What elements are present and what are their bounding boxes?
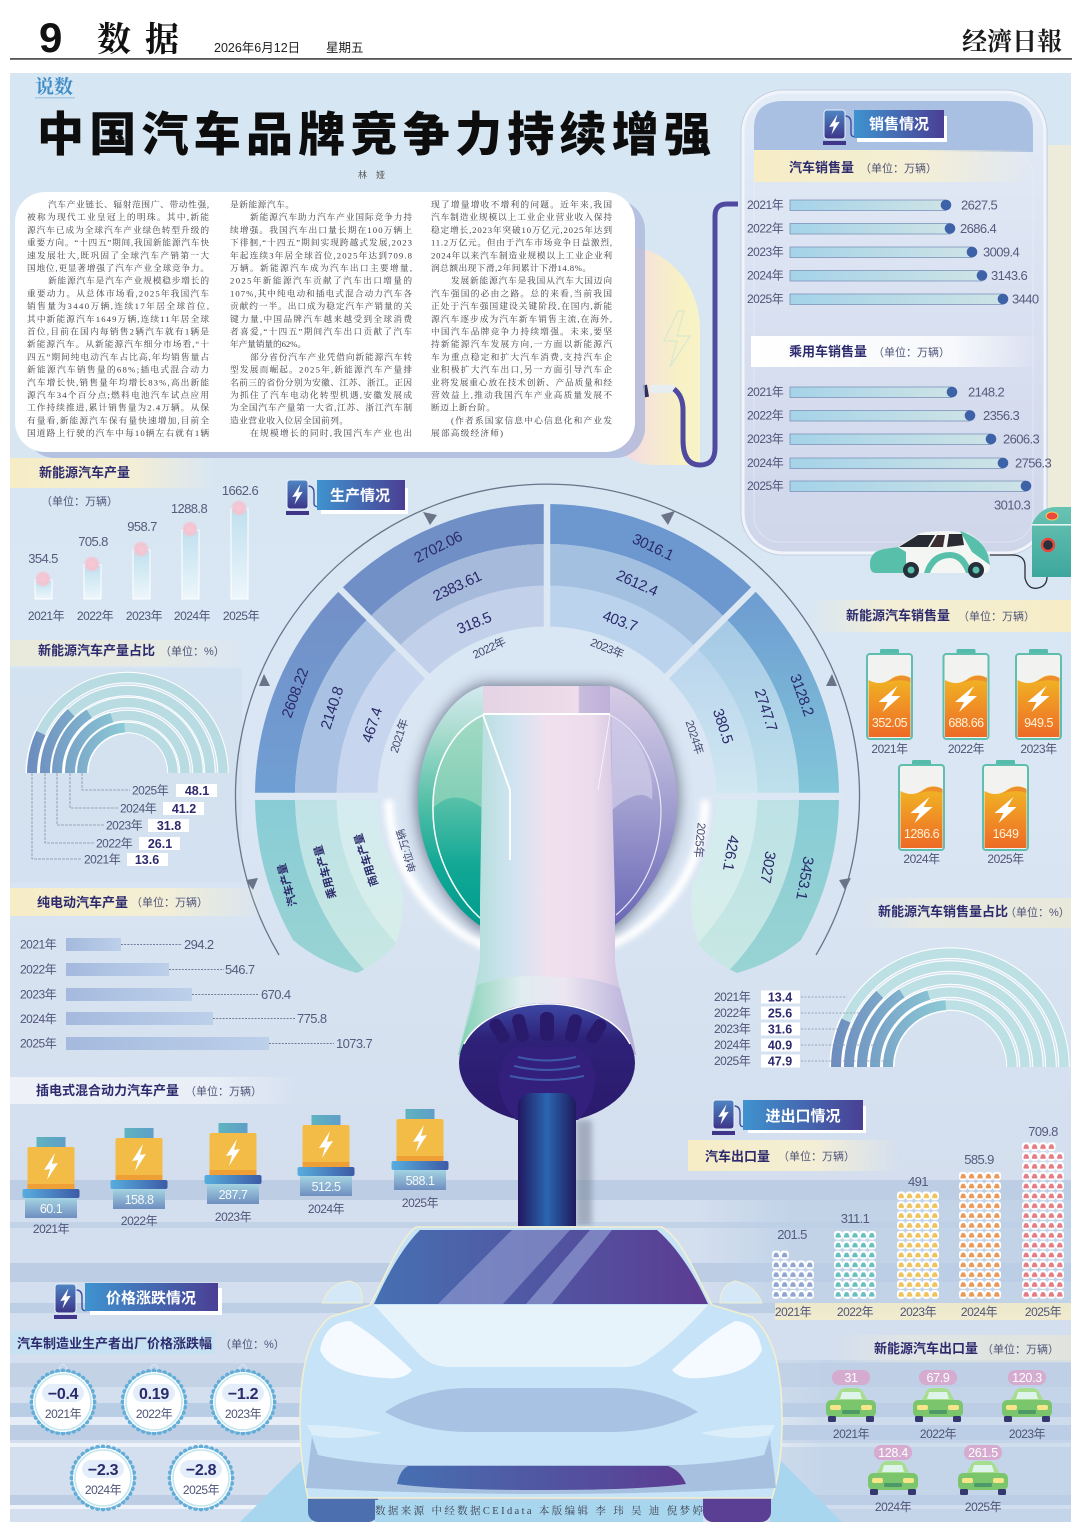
heading: NEV exports: 新能源汽车出口量	[874, 1341, 978, 1356]
mirrors	[322, 1281, 762, 1303]
lower intake	[397, 1466, 686, 1490]
chart: PHEV batteries: 158.8	[125, 1193, 154, 1207]
chart: PHEV batteries: 588.1	[406, 1174, 435, 1188]
labels: NEV sales share: 2021年	[714, 990, 751, 1004]
article column 3: 营效益上,推动我国汽车产业高质量发展不	[431, 389, 612, 400]
chart: NEV exports cars: 2024年	[875, 1500, 912, 1514]
heading: NEV production: 新能源汽车产量	[39, 465, 130, 480]
labels: NEV sales share: 25.6	[768, 1006, 792, 1020]
heading: PHEV production	[10, 1077, 300, 1104]
series labels: 乘用车产量	[311, 844, 339, 900]
article column 2: 万辆。新能源汽车成为汽车出口主要增量,	[230, 262, 412, 273]
series labels: 汽车产量	[274, 862, 300, 908]
values: 2021: 2021年	[387, 717, 411, 755]
chart: NEV exports cars: 128.4	[878, 1446, 908, 1460]
chart: NEV sales batteries: 949.5	[1024, 716, 1053, 730]
article column 3: 业将发展重心放在技术创新、产品质量和经	[431, 376, 612, 387]
heading: PHEV production: （单位：万辆）	[185, 1084, 262, 1098]
article column 1: 有量看,新能源汽车保有量快速增加,目前全	[27, 414, 209, 425]
masthead: 经濟日報	[962, 28, 1062, 56]
chart: passenger car sales bars: 3010.3	[994, 498, 1031, 512]
chart: passenger car sales bars	[747, 384, 1052, 512]
article column 1: 源汽车已成为全球汽车产业绿色转型升级的	[27, 224, 209, 235]
chart: car sales bars: 2023年	[747, 245, 784, 259]
icon: charging station	[1032, 507, 1071, 577]
heading: NEV sales: （单位：万辆）	[958, 609, 1035, 623]
heading: car sales: （单位：万辆）	[860, 161, 937, 175]
article column 2: 型发展而崛起。2025年,新能源汽车产量排	[230, 364, 412, 375]
chart: NEV exports cars: 2022年	[920, 1427, 957, 1441]
date: 2026年6月12日	[214, 41, 300, 55]
values: 2021	[279, 666, 411, 755]
chart: BEV production bars: 2023年	[20, 988, 57, 1002]
values: 2024: 2747.7	[751, 687, 780, 734]
page number: 9	[39, 14, 62, 61]
values: 2024: 3128.2	[786, 672, 817, 719]
values: 2025: 3027	[756, 850, 779, 884]
chart: NEV production columns: 958.7	[127, 519, 157, 534]
article column 2: 为抓住了汽车电动化转型机遇,安徽发展成	[230, 389, 412, 400]
article column 1: 新能源汽车。从新能源汽车细分市场看,“十	[27, 338, 209, 349]
chart: NEV sales batteries: 2022年	[948, 742, 985, 756]
chart: NEV sales batteries: 352.05	[872, 716, 908, 730]
chart: PHEV batteries: 2022年	[121, 1214, 158, 1228]
chart: NEV exports cars: 2021年	[833, 1427, 870, 1441]
article column 2: 年起连续3年居全球首位,2025年达到709.8	[230, 249, 413, 260]
chart: PHEV batteries: 2025年	[402, 1196, 439, 1210]
heading: NEV share of production: （单位：%）	[160, 644, 225, 658]
chart: exports pictogram: 2024年	[961, 1305, 998, 1319]
chart: NEV sales share semicircle	[801, 953, 1064, 1067]
title: 中国汽车品牌竞争力持续增强	[37, 108, 711, 161]
chart: NEV production columns: 2025年	[223, 609, 260, 623]
chart: passenger car sales bars: 2356.3	[983, 408, 1020, 423]
chart: exports pictogram: 709.8	[1028, 1124, 1058, 1139]
values: 2023: 2612.4	[613, 567, 660, 600]
chart: NEV production columns: 1662.6	[222, 483, 258, 498]
article column 3	[431, 198, 612, 438]
illustration: electric car front	[300, 1227, 782, 1522]
heading: NEV exports: （单位：万辆）	[982, 1342, 1059, 1356]
sector labels	[255, 800, 403, 973]
chart: NEV sales batteries: 2024年	[903, 852, 940, 866]
chart: car sales bars: 2021年	[747, 198, 784, 212]
article column 3: 稳定增长,2023年突破10万亿元,2025年达到	[431, 224, 612, 235]
chart: price gauges: −1.2	[228, 1386, 259, 1403]
chart: exports pictogram: 491	[908, 1174, 928, 1189]
chart: exports pictogram: 585.9	[964, 1152, 994, 1167]
side highlights	[307, 1425, 775, 1438]
values: 2025: 2025年	[691, 822, 709, 858]
chart: NEV exports cars: 2025年	[965, 1500, 1002, 1514]
heading: passenger car sales	[751, 336, 1040, 367]
heading: BEV production: 纯电动汽车产量	[37, 895, 128, 910]
section tab: production	[286, 480, 408, 515]
labels: NEV production share: 31.8	[157, 819, 181, 833]
chart: exports pictogram: 2025年	[1025, 1305, 1062, 1319]
article column 1: 被称为现代工业皇冠上的明珠。其中,新能	[27, 211, 209, 222]
section tab: import export: 进出口情况	[765, 1107, 841, 1125]
article column 1: 汽车增长快,销售量年均增长83%,高出新能	[27, 376, 209, 387]
chart: NEV exports cars	[826, 1370, 1052, 1514]
values: 2025: 3453.1	[792, 855, 817, 901]
chart: car sales bars: 2686.4	[960, 221, 997, 236]
article column 3: 正处于汽车强国建设关键阶段,在国内,新能	[431, 300, 612, 311]
heading: NEV share of production	[10, 640, 245, 666]
icon: pump	[823, 110, 857, 145]
heading: car sales	[754, 150, 1033, 182]
charging plug	[418, 686, 677, 1226]
labels: NEV production share: 41.2	[172, 802, 196, 816]
sector 2023	[547, 524, 739, 662]
values: 2024: 380.5	[709, 707, 736, 746]
labels: NEV sales share: 47.9	[768, 1054, 792, 1068]
chart: passenger car sales bars: 2023年	[747, 432, 784, 446]
values: 2023: 403.7	[600, 607, 639, 636]
chart: NEV sales batteries: 1286.6	[904, 827, 940, 841]
article column 1: 源汽车34个百分点;燃料电池汽车试点应用	[27, 389, 209, 400]
windshield	[374, 1230, 708, 1304]
chart: NEV production columns: 354.5	[28, 551, 58, 566]
article column 1: 四五”期间纯电动汽车占比高,年均销售量占	[27, 351, 209, 362]
heading: exports	[688, 1140, 900, 1171]
chart: price gauges: 0.19	[139, 1386, 169, 1403]
article column 1: 速发展壮大,既巩固了全球汽车产销第一大	[27, 249, 209, 260]
kicker: 说数	[35, 76, 73, 98]
chart: BEV production bars: 775.8	[297, 1011, 327, 1026]
article column 2: 部分省份汽车产业凭借向新能源汽车转	[250, 351, 412, 362]
article column 1: 销售量为3440万辆,连续17年居全球首位,	[27, 300, 209, 311]
chart: exports pictogram: 2023年	[900, 1305, 937, 1319]
page header: 据	[145, 21, 179, 59]
article column 2: 下徘徊,“十四五”期间实现跨越式发展,2023	[230, 237, 412, 248]
chart: BEV production bars: 546.7	[225, 962, 255, 977]
plug body	[458, 686, 636, 1055]
page header: 星期五	[326, 41, 364, 55]
article column 2: 键力量,中国品牌汽车越来越受到全球消费	[230, 313, 412, 324]
values: 2022: 2022年	[470, 634, 508, 662]
article column 1: 重要动力。从总体市场看,2025年我国汽车	[27, 287, 209, 298]
headlights	[320, 1321, 762, 1378]
plug glow and shadow	[389, 684, 705, 958]
chart: car sales bars: 3143.6	[991, 268, 1028, 283]
chart: car sales bars: 3440	[1012, 292, 1039, 306]
article column 1	[27, 198, 209, 438]
series labels: 商用车产量	[351, 832, 381, 888]
tyres	[308, 1486, 771, 1522]
chart: BEV production bars: 670.4	[261, 987, 291, 1002]
sector 2024	[681, 604, 819, 796]
article column 3: 汽车制造业规模以上工业企业营业收入保持	[431, 211, 612, 222]
chart: exports pictogram: 2021年	[775, 1305, 812, 1319]
chart: passenger car sales bars: 2025年	[747, 479, 784, 493]
icon: charging car	[870, 531, 1047, 588]
labels: NEV sales share: 13.4	[768, 990, 792, 1004]
article column 2: 年产量销量的62%。	[230, 338, 306, 349]
chart: exports pictogram: 311.1	[841, 1211, 870, 1226]
chart: NEV exports cars: 120.3	[1012, 1371, 1042, 1385]
heading: NEV share of sales: （单位：%）	[1005, 905, 1070, 919]
heading: producer prices: 汽车制造业生产者出厂价格涨跌幅	[17, 1336, 212, 1351]
article column 1: 首位,目前在国内每销售2辆汽车就有1辆是	[27, 326, 209, 336]
chart: NEV production columns: 1288.8	[171, 501, 207, 516]
article column 2: 名前三的省份分别为安徽、江苏、浙江。正因	[230, 376, 412, 387]
article column 3: 业积极扩大汽车出口,另一方面引导汽车企	[431, 364, 612, 375]
chart: NEV production columns: 705.8	[78, 534, 108, 549]
article column 3: 汽车强国的必由之路。总的来看,当前我国	[431, 287, 612, 298]
labels: NEV production share	[84, 784, 217, 867]
values: 2022: 2383.61	[430, 568, 484, 605]
charging station backdrop	[622, 204, 738, 465]
labels: NEV sales share: 2022年	[714, 1006, 751, 1020]
outer arrow arc	[236, 484, 860, 955]
article column 1: 新能源汽车销售量的68%;插电式混合动力	[27, 364, 209, 375]
chart: car sales bars: 2022年	[747, 222, 784, 236]
heading: NEV share of sales: 新能源汽车销售量占比	[878, 904, 1008, 919]
chart: PHEV batteries: 60.1	[40, 1202, 63, 1216]
article column 3: (作者系国家信息中心信息化和产业发	[451, 414, 612, 425]
article column 1: 重要方向。“十四五”期间,我国新能源汽车快	[27, 237, 209, 248]
sector 2025	[691, 800, 839, 973]
values: 2021: 2140.8	[318, 685, 347, 731]
section tab: prices	[54, 1283, 222, 1319]
values: 2023: 3016.1	[629, 531, 676, 564]
chart: price gauges: −0.4	[48, 1386, 79, 1403]
values: 2023	[588, 531, 676, 661]
page header	[10, 14, 1072, 61]
grille	[385, 1388, 698, 1432]
article column 1: 工作持续推进,累计销售量为2.4万辆。从保	[27, 402, 209, 413]
article column 3: 车为重点稳定和扩大汽车消费,支持汽车企	[431, 351, 612, 362]
labels: NEV production share: 13.6	[135, 853, 159, 867]
chart: PHEV batteries: 2021年	[33, 1222, 70, 1236]
labels: NEV sales share: 40.9	[768, 1038, 792, 1052]
chart: NEV sales batteries	[867, 649, 1061, 866]
footer credits: 数据来源 中经数据CEIdata 本版编辑 李 玮 吴 迪 倪梦婷	[375, 1504, 704, 1517]
values: 2024: 2024年	[682, 718, 707, 756]
heading: NEV share of production: 新能源汽车产量占比	[38, 643, 155, 658]
chart: NEV production columns: 2023年	[126, 609, 163, 623]
values: 2025: 426.1	[719, 834, 742, 872]
article column 3: 持新能源汽车发展方向,一方面以新能源汽	[431, 338, 612, 349]
article column 2: 是新能源汽车。	[230, 198, 294, 210]
chart: BEV production bars	[20, 937, 373, 1051]
chart: BEV production bars: 2025年	[20, 1036, 57, 1050]
chart: price gauges: 2024年	[85, 1483, 122, 1497]
article column 2: 贡献约一半。出口成为稳定汽车产销量的关	[230, 300, 412, 311]
chart: NEV sales batteries: 1649	[993, 827, 1019, 841]
heading: producer prices: （单位：%）	[220, 1337, 285, 1351]
article column 2: 为全国汽车产量第一大省,江苏、浙江汽车制	[230, 402, 412, 413]
chart: PHEV batteries: 2024年	[308, 1202, 345, 1216]
tab: sales	[854, 110, 947, 142]
chart: passenger car sales bars: 2756.3	[1015, 456, 1052, 470]
heading: NEV sales	[810, 600, 1071, 632]
heading: producer prices	[10, 1331, 285, 1354]
chart: NEV exports cars: 67.9	[926, 1371, 950, 1385]
chart: price gauges: −2.3	[88, 1462, 119, 1479]
byline: 林 娅	[358, 169, 385, 180]
heading: BEV production: （单位：万辆）	[131, 895, 208, 909]
labels: NEV sales share	[714, 990, 800, 1068]
labels: NEV production share: 26.1	[148, 837, 172, 851]
section tab: production: 生产情况	[330, 486, 390, 504]
chart: NEV sales batteries: 2025年	[987, 852, 1024, 866]
chart: passenger car sales bars: 2022年	[747, 408, 784, 422]
labels: NEV production share: 2025年	[132, 784, 169, 798]
chart: car sales bars: 2627.5	[961, 198, 998, 212]
chart: price gauges: 2025年	[183, 1483, 220, 1497]
heading: passenger car sales: 乘用车销售量	[789, 344, 867, 359]
article column 3: 润总额出现下滑,2年间累计下滑14.8%。	[431, 262, 591, 273]
labels: NEV sales share: 2025年	[714, 1054, 751, 1068]
labels: NEV sales share: 2023年	[714, 1022, 751, 1036]
labels: NEV production share: 48.1	[185, 784, 209, 798]
values: 2022: 2702.06	[411, 528, 465, 567]
chart: passenger car sales bars: 2021年	[747, 385, 784, 399]
sector 2021	[275, 604, 413, 796]
panel: sales situation	[741, 90, 1052, 555]
series labels	[274, 827, 419, 908]
chart: NEV production share semicircle	[32, 678, 223, 859]
chart: car sales bars: 2024年	[747, 268, 784, 282]
article column 2: 新能源汽车助力汽车产业国际竞争力持	[250, 211, 412, 222]
article column 1: 汽车产业链长、辐射范围广、带动性强,	[48, 198, 209, 210]
heading: PHEV production: 插电式混合动力汽车产量	[36, 1083, 179, 1098]
chart: car sales bars: 3009.4	[983, 244, 1020, 260]
values: 2025	[691, 822, 817, 901]
article column 3: 中国汽车品牌竞争力持续增强。未来,要坚	[431, 326, 612, 336]
chart: NEV production columns	[28, 483, 260, 623]
article column 2: 在规模增长的同时,我国汽车产业也出	[250, 427, 412, 438]
article column 1: 新能源汽车是汽车产业规模稳步增长的	[48, 275, 209, 286]
chart: NEV exports cars: 261.5	[968, 1446, 998, 1460]
article column 2: 续增强。我国汽车出口量长期在100万辆上	[230, 224, 412, 235]
labels: NEV sales share: 31.6	[768, 1022, 792, 1036]
article column 1: 国地位,更显著增强了汽车产业全球竞争力。	[27, 262, 209, 273]
chart: passenger car sales bars: 2024年	[747, 456, 784, 470]
article column 3: 展部高级经济师)	[431, 427, 503, 438]
sector 2022	[355, 524, 547, 662]
lower bumper	[306, 1437, 776, 1494]
article text panel	[15, 192, 645, 458]
heading: BEV production	[10, 888, 265, 916]
article column 3: 11.2万亿元。但由于汽车市场竞争日益激烈,	[431, 237, 612, 248]
article column 3: 源汽车逐步成为汽车新车销售主流,在海外,	[431, 313, 612, 324]
chart: price gauges: −2.8	[186, 1462, 217, 1479]
chart: PHEV batteries: 2023年	[215, 1210, 252, 1224]
labels: NEV production share: 2022年	[96, 836, 133, 850]
chart: BEV production bars: 1073.7	[336, 1036, 373, 1051]
article column 3: 发展新能源汽车是我国从汽车大国迈向	[451, 275, 612, 286]
heading: car sales: 汽车销售量	[789, 160, 854, 175]
chart: NEV exports cars: 2023年	[1009, 1427, 1046, 1441]
heading: NEV sales: 新能源汽车销售量	[846, 608, 950, 623]
unit: （单位：万辆）	[41, 494, 118, 508]
chart: passenger car sales bars: 2148.2	[968, 384, 1005, 400]
chart: PHEV batteries: 287.7	[219, 1188, 248, 1202]
chart: price gauges: 2021年	[45, 1407, 82, 1421]
chart: BEV production bars: 2024年	[20, 1012, 57, 1026]
article column 1: 国道路上行驶的汽车中每10辆左右就有1辆	[27, 427, 209, 438]
chart: NEV production columns: 2022年	[77, 609, 114, 623]
article column 2: 2025年新能源汽车贡献了汽车出口增量的	[230, 275, 412, 286]
article column 2	[230, 198, 413, 438]
section tab: prices: 价格涨跌情况	[106, 1289, 196, 1307]
chart: NEV sales batteries: 2023年	[1020, 742, 1057, 756]
chart: PHEV batteries: 512.5	[312, 1180, 341, 1194]
chart: passenger car sales bars: 2606.3	[1003, 432, 1040, 446]
section name: 数	[97, 21, 131, 59]
chart: price gauges	[32, 1364, 274, 1509]
chart: NEV sales batteries: 688.66	[948, 716, 984, 730]
section tab: import export	[712, 1100, 866, 1135]
chart: exports pictogram	[772, 1124, 1071, 1320]
tab: sales: 销售情况	[869, 115, 929, 133]
article column 3: 断迈上新台阶。	[431, 402, 495, 413]
chart: PHEV batteries	[22, 1109, 448, 1236]
labels: NEV sales share: 2024年	[714, 1038, 751, 1052]
hood	[374, 1305, 708, 1367]
heading: passenger car sales: （单位：万辆）	[873, 345, 950, 359]
values: 2023: 2023年	[588, 635, 626, 661]
heading: NEV production	[10, 458, 215, 488]
chart: BEV production bars: 2022年	[20, 962, 57, 976]
heading: exports: （单位：万辆）	[778, 1149, 855, 1163]
article column 1: 其中新能源汽车1649万辆,连续11年居全球	[27, 313, 209, 324]
plug head	[418, 686, 677, 925]
article column 3: 现了增量增收不增利的问题。近年来,我国	[431, 198, 612, 210]
article column 2: 107%,其中纯电动和插电式混合动力汽车各	[230, 287, 412, 298]
radial chart: vehicle production by year	[234, 484, 860, 973]
values: 2022: 318.5	[455, 609, 494, 638]
values: 2024	[682, 672, 817, 756]
chart: price gauges: 2022年	[136, 1407, 173, 1421]
chart: NEV production columns: 2024年	[174, 609, 211, 623]
values: 2021: 467.4	[359, 706, 386, 745]
labels: NEV production share: 2021年	[84, 852, 121, 866]
article column 3: 2024年以来汽车制造业规模以上工业企业利	[431, 249, 612, 260]
chart: NEV sales batteries: 2021年	[871, 742, 908, 756]
values: 2021: 2608.22	[279, 666, 312, 720]
labels: NEV production share: 2024年	[120, 802, 157, 816]
car body	[300, 1227, 782, 1498]
chart: exports pictogram: 201.5	[777, 1227, 807, 1242]
article column 2: 造业营业收入位居全国前列。	[230, 414, 348, 425]
chart: BEV production bars: 294.2	[184, 937, 214, 952]
chart: price gauges: 2023年	[225, 1407, 262, 1421]
chart: car sales bars: 2025年	[747, 292, 784, 306]
heading: NEV exports	[830, 1335, 1071, 1362]
chart: BEV production bars: 2021年	[20, 938, 57, 952]
plug flange	[459, 1003, 635, 1226]
article column 2: 者喜爱,“十四五”期间汽车出口贡献了汽车	[230, 326, 412, 336]
heading: NEV share of sales	[860, 898, 1071, 928]
heading: exports: 汽车出口量	[705, 1149, 770, 1164]
chart: NEV exports cars: 31	[844, 1371, 858, 1385]
chart: NEV production columns: 2021年	[28, 609, 65, 623]
labels: NEV production share: 2023年	[106, 818, 143, 832]
values: 2022	[411, 528, 508, 662]
chart: car sales bars	[747, 198, 1039, 306]
series labels: 单位:万辆	[394, 827, 419, 874]
chart: exports pictogram: 2022年	[837, 1305, 874, 1319]
